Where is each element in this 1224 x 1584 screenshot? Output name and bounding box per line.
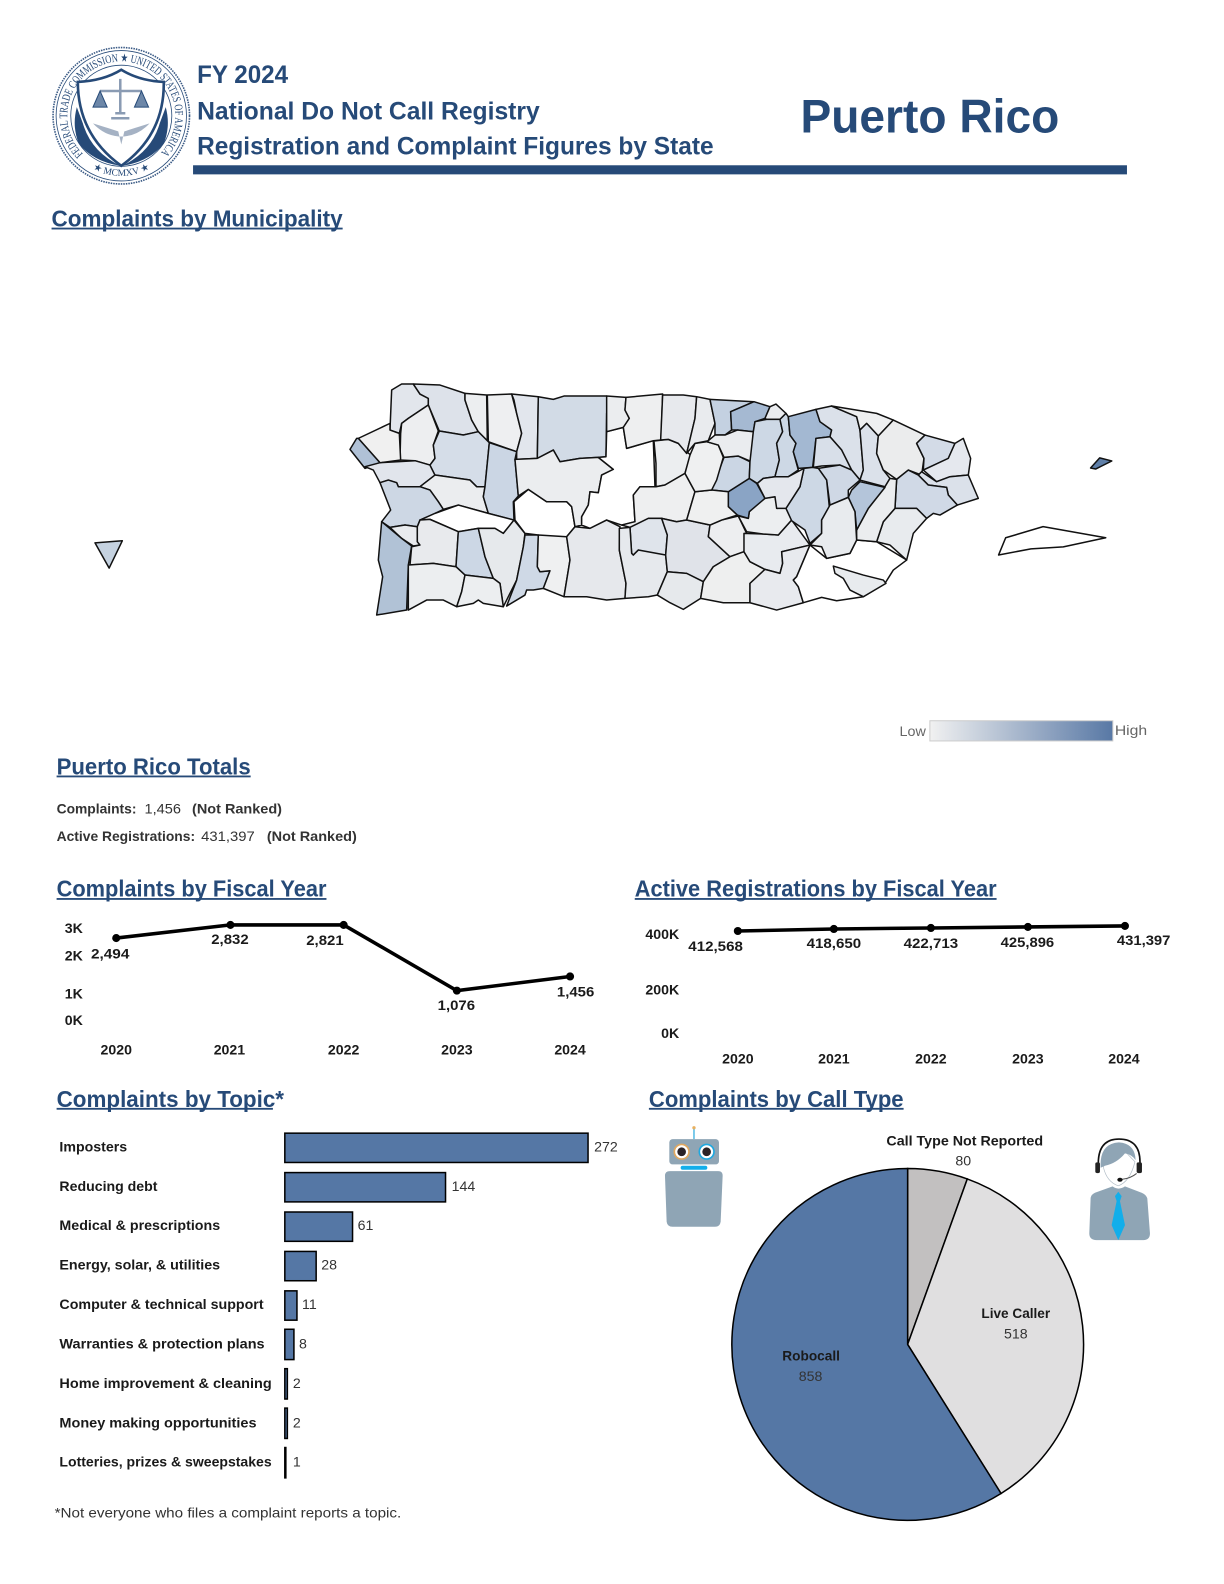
line chart: active registrations by fiscal year: 0K — [661, 1025, 680, 1041]
map legend — [900, 721, 1147, 741]
line chart: complaints by fiscal year: 2023 — [441, 1041, 473, 1057]
bar chart: complaints by topic: 8 — [299, 1335, 307, 1351]
line chart: complaints by fiscal year: 3K — [65, 920, 84, 936]
line chart: complaints by fiscal year: 1,076 — [438, 997, 475, 1013]
map legend: Low — [900, 723, 927, 739]
bar chart: complaints by topic: 28 — [321, 1257, 337, 1273]
line chart: complaints by fiscal year: 2K — [65, 947, 84, 963]
line chart: active registrations by fiscal year: 200K — [645, 982, 680, 998]
bar chart: complaints by topic: Warranties & protection plans — [59, 1335, 265, 1351]
line chart: complaints by fiscal year: 1K — [65, 986, 84, 1002]
seal: Federal Trade Commission: ★ MCMXV ★ — [94, 164, 148, 176]
title: report heading: FY 2024 — [197, 61, 288, 89]
line chart: complaints by fiscal year: 2,832 — [211, 931, 249, 947]
line chart: complaints by fiscal year — [65, 920, 594, 1057]
line chart: complaints by fiscal year: 2,821 — [306, 932, 344, 948]
line chart: complaints by fiscal year: 2020 — [101, 1041, 132, 1057]
bar chart: complaints by topic: Energy, solar, & utilities — [59, 1257, 220, 1273]
pie labels: 858 — [799, 1368, 823, 1384]
icon: live caller with headset — [1089, 1139, 1150, 1240]
totals text: Active Registrations: — [57, 828, 195, 844]
bar chart: complaints by topic: 272 — [594, 1138, 618, 1154]
heading: complaints by fiscal year: Complaints by Fiscal Year — [57, 876, 326, 902]
title: state name: Puerto Rico — [801, 90, 1059, 143]
bar chart: complaints by topic: 2 — [293, 1375, 301, 1391]
heading: complaints by municipality: Complaints by Municipality — [52, 205, 343, 231]
pie labels: 80 — [955, 1153, 971, 1169]
totals text: (Not Ranked) — [192, 801, 282, 817]
bar chart: complaints by topic: 11 — [302, 1296, 317, 1312]
line chart: active registrations by fiscal year: 418,650 — [807, 935, 861, 951]
line chart: active registrations by fiscal year: 2024 — [1108, 1050, 1140, 1066]
map legend: High — [1115, 722, 1147, 738]
bar chart: complaints by topic: 61 — [358, 1217, 373, 1233]
title: report heading — [197, 61, 714, 161]
line chart: active registrations by fiscal year: 400K — [645, 926, 680, 942]
line chart: complaints by fiscal year: 2021 — [214, 1041, 245, 1057]
line chart: complaints by fiscal year: 2024 — [554, 1041, 586, 1057]
bar chart: complaints by topic: Home improvement & cleaning — [59, 1375, 272, 1391]
heading: totals: Puerto Rico Totals — [57, 753, 251, 779]
pie labels: Call Type Not Reported — [886, 1132, 1043, 1148]
line chart: active registrations by fiscal year — [645, 922, 1171, 1066]
bar chart: complaints by topic: Lotteries, prizes & sweepstakes — [59, 1454, 272, 1470]
line chart: active registrations by fiscal year: 422,713 — [904, 935, 958, 951]
heading: complaints by topic: Complaints by Topic* — [57, 1086, 285, 1112]
line chart: active registrations by fiscal year: 431,397 — [1117, 932, 1171, 948]
pie labels: Robocall — [782, 1348, 840, 1364]
bar chart: complaints by topic: 2 — [293, 1414, 301, 1430]
line chart: complaints by fiscal year: 2,494 — [91, 945, 130, 961]
heading: complaints by call type: Complaints by Call Type — [649, 1086, 904, 1112]
totals text: 1,456 — [145, 801, 181, 817]
bar chart: complaints by topic: Computer & technical support — [59, 1296, 264, 1312]
bar chart: complaints by topic — [59, 1133, 618, 1478]
bar chart: complaints by topic: 144 — [452, 1178, 475, 1194]
line chart: active registrations by fiscal year: 2022 — [915, 1050, 947, 1066]
totals text — [57, 801, 357, 844]
line chart: active registrations by fiscal year: 2020 — [722, 1050, 754, 1066]
bar chart: complaints by topic: Imposters — [59, 1138, 127, 1154]
pie labels — [782, 1132, 1051, 1384]
line chart: complaints by fiscal year: 2022 — [328, 1041, 360, 1057]
totals text: 431,397 — [201, 828, 255, 844]
totals text: Complaints: — [57, 801, 136, 817]
line chart: active registrations by fiscal year: 2023 — [1012, 1050, 1044, 1066]
bar chart: complaints by topic: Reducing debt — [59, 1178, 158, 1194]
pie chart: complaints by call type — [732, 1169, 1084, 1520]
pie labels: 518 — [1004, 1325, 1028, 1341]
choropleth map of municipalities — [95, 384, 1112, 615]
pie labels: Live Caller — [981, 1305, 1051, 1321]
footnote: *Not everyone who files a complaint reports a topic. — [55, 1504, 401, 1520]
bar chart: complaints by topic: Money making opportunities — [59, 1414, 257, 1430]
bar chart: complaints by topic: 1 — [293, 1454, 301, 1470]
title: report heading: National Do Not Call Registry — [197, 97, 540, 125]
line chart: active registrations by fiscal year: 412,568 — [688, 938, 743, 954]
line chart: complaints by fiscal year: 0K — [65, 1012, 84, 1028]
totals text: (Not Ranked) — [267, 828, 357, 844]
heading: active registrations by fiscal year: Active Registrations by Fiscal Year — [635, 876, 997, 902]
icon: robot — [665, 1126, 723, 1227]
line chart: active registrations by fiscal year: 425,896 — [1001, 934, 1054, 950]
bar chart: complaints by topic: Medical & prescriptions — [59, 1217, 220, 1233]
seal: Federal Trade Commission: FEDERAL TRADE COMMISSION ★ UNITED STATES OF AMERICA — [60, 54, 184, 159]
line chart: active registrations by fiscal year: 2021 — [818, 1050, 850, 1066]
title: report heading: Registration and Complaint Figures by State — [197, 133, 714, 161]
line chart: complaints by fiscal year: 1,456 — [557, 984, 594, 1000]
